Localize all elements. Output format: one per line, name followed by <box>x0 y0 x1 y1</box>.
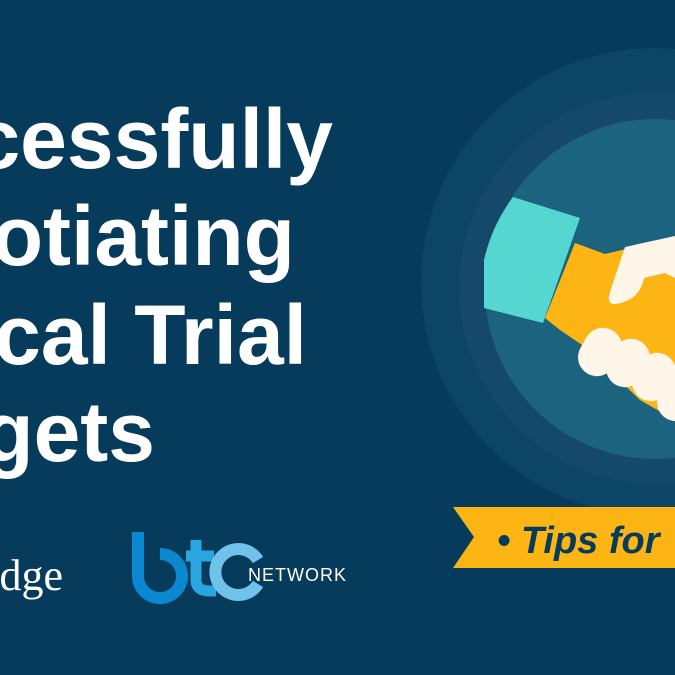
teal cuff <box>484 197 580 323</box>
illustration: handshake <box>484 197 675 428</box>
banner: tips: • Tips for <box>497 520 662 562</box>
title <box>0 92 333 479</box>
yellow arms <box>545 236 675 420</box>
concentric circles background <box>421 48 675 516</box>
logo: btc network: NETWORK <box>248 565 347 585</box>
banner: tips <box>453 507 675 568</box>
white thumb <box>609 236 675 304</box>
logo: btc network <box>138 532 347 598</box>
white fingers <box>571 321 675 428</box>
